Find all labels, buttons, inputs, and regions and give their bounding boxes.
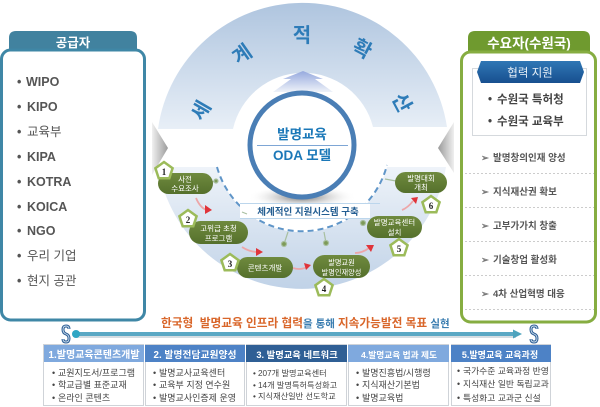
supplier list: • <box>17 125 21 139</box>
panel: central diagram <box>152 3 454 295</box>
supplier list box <box>2 50 144 320</box>
card 4: law and system <box>348 344 449 406</box>
recipient goals: ➢ <box>481 187 490 198</box>
card 5: curriculum: 지식재산 일반 독립교과 <box>463 379 549 389</box>
step 3 <box>221 254 293 278</box>
recipient goals <box>481 152 566 300</box>
supplier list: WIPO <box>26 75 60 89</box>
supplier list: KIPO <box>27 100 58 114</box>
dashed support arc <box>217 165 387 231</box>
card 2: teacher training: 교육부 지정 연수원 <box>159 380 230 390</box>
card 4: law and system: 발명교육법 <box>362 393 403 403</box>
supplier list: KOICA <box>27 200 67 214</box>
step 6: 6 <box>429 201 434 211</box>
recipient goals: ➢ <box>481 289 490 300</box>
supplier heading: 공급자 <box>56 36 91 50</box>
arc lettering: 세 <box>187 97 216 124</box>
supplier list: 교육부 <box>27 125 62 139</box>
step 4: 발명교원 <box>328 258 355 267</box>
supplier list: • <box>17 100 21 114</box>
supplier list: KOTRA <box>27 175 71 189</box>
card 3: network: 3. 발명교육 네트워크 <box>256 349 338 360</box>
step 1: 1 <box>162 167 167 177</box>
card 1: contents: 교원지도서/프로그램 <box>58 367 135 378</box>
central circle: ODA model <box>250 93 354 197</box>
cooperation support box <box>472 61 586 136</box>
supplier list: KIPA <box>27 150 56 164</box>
upper arc: global spread <box>158 3 447 129</box>
card 5: curriculum: 5.발명교육 교육과정 <box>462 349 538 360</box>
step 1 <box>155 162 213 194</box>
card 3: network: • <box>253 369 256 378</box>
step arrows <box>196 197 418 270</box>
supplier list: • <box>17 274 21 288</box>
step 6 <box>395 172 447 212</box>
supplier list <box>17 75 77 288</box>
link arrow <box>72 330 522 338</box>
card 1: contents: • <box>52 368 55 378</box>
step 2: 고위급 초청 <box>200 224 237 233</box>
supplier list: • <box>17 175 21 189</box>
arc lettering: 계 <box>228 40 256 69</box>
step 2 <box>179 210 248 244</box>
card 3: network: 207개 발명교육센터 <box>258 368 327 378</box>
recipient goals: 4차 산업혁명 대응 <box>493 288 565 300</box>
card 4: law and system: 지식재산기본법 <box>362 380 420 390</box>
card 2: teacher training: • <box>153 393 156 403</box>
cooperation partners: 수원국 특허청 <box>497 92 564 106</box>
card 5: curriculum: 특성화고 교과군 신설 <box>463 393 541 403</box>
step 4 <box>313 255 370 295</box>
step 5: 설치 <box>388 228 401 237</box>
supplier list: • <box>17 150 21 164</box>
step 4: 발명인재양성 <box>322 268 361 277</box>
card 4: law and system: 발명진흥법/시행령 <box>362 367 431 378</box>
supplier heading <box>9 31 137 52</box>
card 2: teacher training <box>145 344 245 406</box>
step 3: 3 <box>228 259 233 269</box>
support system banner: 체계적인 지원시스템 구축 <box>257 206 359 218</box>
card 1: contents: • <box>52 380 55 390</box>
recipient heading: 수요자(수원국) <box>487 36 571 51</box>
card 2: teacher training: 발명교사인증제 운영 <box>159 393 236 403</box>
card 4: law and system: 4.발명교육 법과 제도 <box>361 349 437 360</box>
recipient goals: ➢ <box>481 153 490 164</box>
card 5: curriculum: • <box>457 366 460 376</box>
central circle: ODA model: ODA 모델 <box>273 148 331 163</box>
supplier list: 우리 기업 <box>27 249 76 263</box>
icon: left grey arrow <box>152 122 168 175</box>
step 5: 발명교육센터 <box>374 217 415 227</box>
arc lettering: 적 <box>293 24 311 47</box>
step 2: 2 <box>186 215 191 225</box>
recipient goals: 지식재산권 확보 <box>493 186 557 198</box>
card 4: law and system: • <box>356 380 359 390</box>
card 1: contents: 학교급별 표준교재 <box>58 380 127 390</box>
recipient goals: 발명창의인재 양성 <box>493 152 566 164</box>
icon: left chain <box>63 326 69 342</box>
card 4: law and system: • <box>356 368 359 378</box>
card 5: curriculum: 국가수준 교육과정 반영 <box>463 366 549 376</box>
step 6: 발명대회 <box>407 173 435 183</box>
supplier list: • <box>17 249 21 263</box>
card 3: network: 지식재산일반 선도학교 <box>258 391 336 401</box>
card 1: contents <box>44 344 144 406</box>
arc lettering: 산 <box>387 89 416 116</box>
panel: recipients <box>462 31 596 322</box>
card 5: curriculum: • <box>457 379 460 389</box>
card 1: contents: 온라인 콘텐츠 <box>58 393 110 403</box>
recipient goals: 고부가가치 창출 <box>493 220 557 232</box>
supplier list: • <box>17 75 21 89</box>
cooperation partners <box>488 92 564 128</box>
card 2: teacher training: • <box>153 368 156 378</box>
step 5: 5 <box>397 244 402 254</box>
supplier list: NGO <box>27 224 56 238</box>
icon: up arrow <box>273 71 333 92</box>
icon: right grey arrow <box>438 122 454 173</box>
card 3: network: 14개 발명특허특성화고 <box>258 380 338 390</box>
card 5: curriculum <box>451 344 551 406</box>
icon: right chain <box>531 326 537 342</box>
central circle: ODA model: 발명교육 <box>277 127 327 142</box>
card 2: teacher training: • <box>153 380 156 390</box>
lower arc band <box>158 167 446 289</box>
recipient heading <box>468 31 590 54</box>
step 4: 4 <box>322 284 327 294</box>
card 3: network <box>246 344 347 406</box>
cooperation partners: • <box>488 116 492 128</box>
card 5: curriculum: • <box>457 393 460 403</box>
recipient goals: ➢ <box>481 221 490 232</box>
panel: suppliers <box>2 31 144 320</box>
card 3: network: • <box>253 392 256 401</box>
cooperation partners: 수원국 교육부 <box>497 114 564 128</box>
supplier list: • <box>17 224 21 238</box>
supplier list: 현지 공관 <box>27 274 77 288</box>
card 2: teacher training: 2. 발명전담교원양성 <box>154 348 236 361</box>
cooperation support banner: 협력 지원 <box>507 66 553 80</box>
step 2: 프로그램 <box>205 233 232 243</box>
arc lettering: 확 <box>349 35 376 64</box>
recipient list box <box>462 52 596 322</box>
recipient goals: ➢ <box>481 255 490 266</box>
card 2: teacher training: 발명교사교육센터 <box>159 368 225 378</box>
cooperation partners: • <box>488 94 492 106</box>
step 1: 수요조사 <box>171 184 199 193</box>
card 4: law and system: • <box>356 393 359 403</box>
card 3: network: • <box>253 381 256 390</box>
goal headline: 한국형 발명교육 인프라 협력을 통해 지속가능발전 목표 실현 <box>161 316 450 330</box>
supplier list: • <box>17 200 21 214</box>
step 3: 콘텐츠개발 <box>248 262 282 272</box>
arc lettering <box>187 24 416 124</box>
step 5 <box>367 216 422 255</box>
connector pins <box>208 179 396 246</box>
card 1: contents: 1.발명교육콘텐츠개발 <box>48 348 140 361</box>
circle shadow <box>248 185 356 209</box>
step 6: 개최 <box>414 182 428 192</box>
step 1: 사전 <box>178 174 192 184</box>
recipient goals: 기술창업 활성화 <box>493 254 557 266</box>
card 1: contents: • <box>52 393 55 403</box>
support system banner <box>240 203 380 218</box>
